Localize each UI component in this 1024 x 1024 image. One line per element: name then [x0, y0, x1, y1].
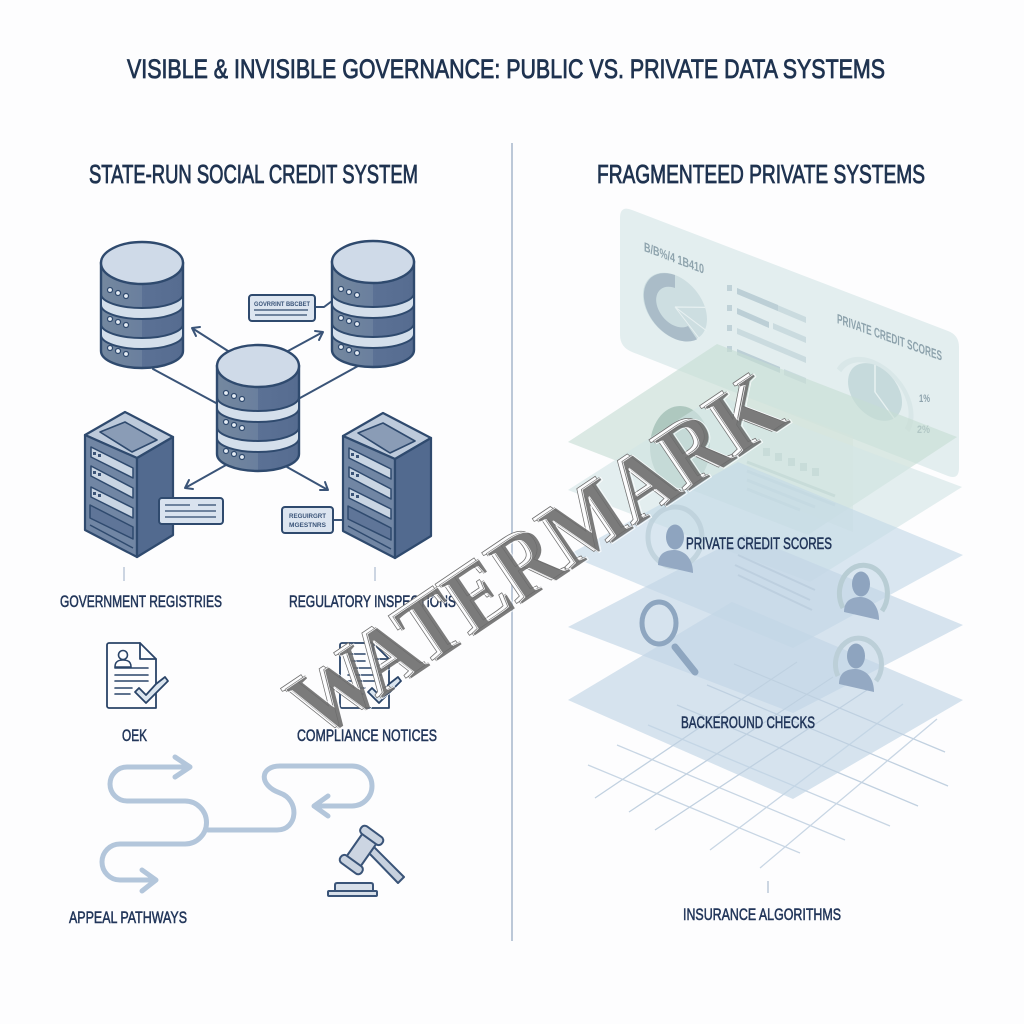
faint report lines	[735, 555, 815, 610]
center divider	[511, 143, 513, 941]
green plane pie and report card	[650, 397, 853, 532]
label: appeal pathways: APPEAL PATHWAYS	[69, 908, 187, 927]
label: background checks: BACKEROUND CHECKS	[681, 713, 815, 732]
server rack: left	[85, 412, 173, 557]
icon: compliance document	[340, 643, 401, 708]
icon: person three	[835, 638, 881, 692]
icon: magnifying glass	[642, 602, 695, 672]
donut chart	[643, 263, 707, 351]
icon: identity document	[107, 643, 168, 708]
server rack: right	[343, 413, 431, 558]
callout: government record	[249, 295, 315, 321]
callout: government record: GOVRRINT BBCBET	[254, 301, 310, 308]
callout: regulatory inspections: MGESTNRS	[289, 522, 327, 529]
heading: state-run: STATE-RUN SOCIAL CREDIT SYSTEM	[89, 159, 418, 189]
percent labels: 1%	[919, 393, 930, 405]
watermark: WATERMARK	[273, 353, 805, 759]
callout: regulatory inspections	[282, 507, 333, 533]
database: top left	[101, 242, 183, 368]
panel: fragmented private systems	[568, 159, 963, 924]
layer: fourth plane	[568, 535, 963, 713]
database: center	[217, 345, 299, 471]
dashboard plane	[620, 209, 959, 477]
label: insurance algorithms: INSURANCE ALGORITHMS	[683, 905, 841, 924]
icon: person two	[839, 565, 887, 620]
label: government registries: GOVERNMENT REGISTRIES	[60, 592, 222, 611]
database: top right	[332, 241, 414, 367]
dashboard plane: 2%	[917, 424, 930, 436]
grid overlay	[595, 662, 948, 830]
tick marks	[124, 567, 375, 581]
icon: person one	[648, 507, 702, 573]
gauge pie chart	[839, 349, 911, 433]
connectors and arrows	[137, 301, 358, 520]
label: private credit scores: PRIVATE CREDIT SCORES	[686, 534, 832, 553]
layer: fifth plane	[568, 602, 963, 799]
dashboard label: private credit scores: PRIVATE CREDIT SCORES	[837, 310, 942, 364]
layer: second plane	[568, 395, 962, 582]
dashboard bars	[727, 285, 806, 384]
watermark: WATERMARK	[267, 352, 799, 758]
label: oek: OEK	[122, 726, 147, 745]
tick mark	[767, 881, 769, 893]
callout: registry note	[159, 498, 223, 524]
layer: green top plane	[568, 344, 957, 535]
watermark: WATERMARK	[272, 353, 803, 758]
layer: third plane	[568, 462, 963, 648]
dashboard title: B/B%/4 1B410	[644, 239, 704, 277]
icon: gavel	[328, 824, 404, 896]
panel: state-run social credit system	[60, 159, 456, 927]
appeal pathways arrows	[102, 757, 372, 891]
callout: regulatory inspections: REGUIRGRT	[289, 513, 326, 520]
grid base	[588, 662, 948, 868]
label: compliance notices: COMPLIANCE NOTICES	[297, 726, 437, 745]
label: regulatory inspections: REGULATORY INSPECTIONS	[289, 592, 456, 611]
